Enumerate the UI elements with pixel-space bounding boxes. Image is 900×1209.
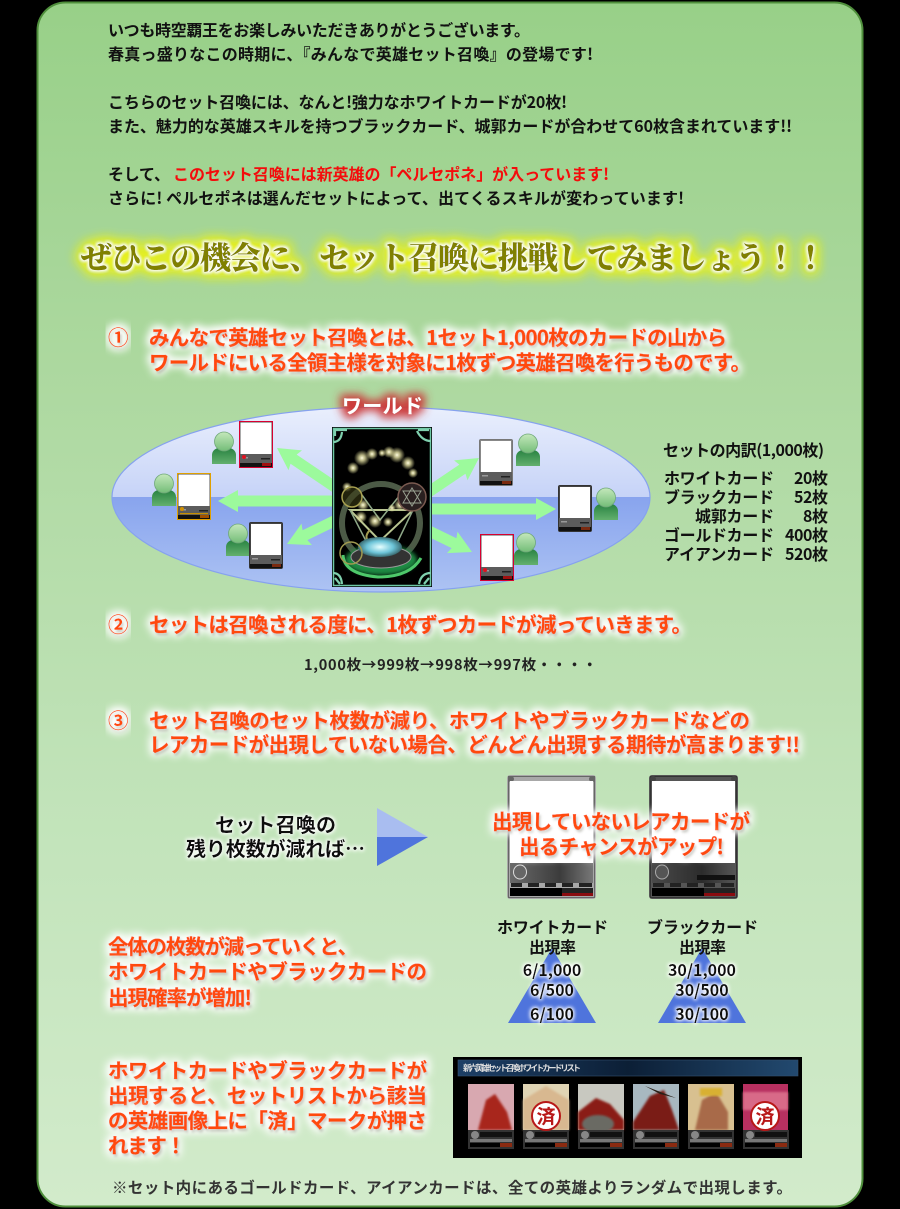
list card 6: 済	[755, 1102, 775, 1129]
screenshot: white card list: 新六英雄セット召喚 ホワイトカードリスト	[463, 1062, 581, 1074]
countdown text: 1,000枚→999枚→998枚→997枚・・・・	[304, 654, 597, 675]
text block: set contents: また、魅力的な英雄スキルを持つブラックカード、城郭カードが合わせて60枚含まれています!!	[108, 113, 792, 137]
pyramid: white card rate: 6/1,000	[523, 957, 581, 981]
text block: intro greeting: 春真っ盛りなこの時期に、『みんなで英雄セット召喚』の登場です!	[108, 41, 593, 65]
text block: stamp explanation	[108, 1054, 428, 1159]
arrow: blue triangle	[377, 808, 428, 866]
step 1 heading: みんなで英雄セット召喚とは、1セット1,000枚のカードの山から	[149, 321, 727, 351]
text block: stamp explanation: ホワイトカードやブラックカードが	[108, 1054, 428, 1084]
text block: new hero notice: このセット召喚には新英雄の「ペルセポネ」が入っています!	[173, 161, 609, 185]
players and cards: left side	[152, 422, 282, 568]
text block: intro greeting: いつも時空覇王をお楽しみいただきありがとうございます。	[108, 17, 530, 41]
step 2 heading: セットは召喚される度に、1枚ずつカードが減っていきます。	[149, 608, 692, 638]
pyramid: white card rate: 出現率	[529, 934, 576, 958]
pyramid: white card rate	[497, 914, 608, 1025]
text block: new hero notice: さらに! ペルセポネは選んだセットによって、出てくるスキルが変わっています!	[108, 185, 684, 209]
pyramid: black card rate: 出現率	[679, 934, 726, 958]
arrows from centre card	[218, 438, 556, 563]
card: black card frame	[649, 775, 738, 899]
card: white card frame	[507, 775, 596, 899]
step 3 heading: ③	[108, 704, 128, 734]
text block: new hero notice: そして、	[108, 161, 170, 185]
callout: rare card chance	[492, 805, 750, 860]
pyramid: black card rate: ブラックカード	[647, 914, 758, 938]
pyramid: white card rate: 6/100	[530, 1001, 574, 1025]
pyramid: black card rate: 30/1,000	[668, 957, 736, 981]
legend: set breakdown: 城郭カード	[695, 503, 774, 527]
text: remaining count: セット召喚の	[215, 809, 336, 838]
list card 1	[468, 1084, 514, 1149]
centre card: magic circle	[332, 427, 432, 587]
text block: probability increases: ホワイトカードやブラックカードの	[108, 955, 427, 985]
step 1 heading	[108, 321, 751, 376]
text: remaining count	[186, 809, 365, 862]
pyramid: white card rate: ホワイトカード	[497, 914, 608, 938]
players and cards: right side	[480, 434, 618, 580]
step 2 heading: ②	[108, 608, 128, 638]
text block: set contents	[108, 89, 792, 137]
list card 6	[743, 1084, 789, 1149]
pyramid: black card rate: 30/100	[675, 1001, 729, 1025]
list card 2: 済	[536, 1102, 556, 1129]
legend: set breakdown: 520枚	[785, 541, 828, 565]
text block: intro greeting	[108, 17, 593, 65]
legend: set breakdown: セットの内訳(1,000枚)	[663, 437, 824, 461]
text: remaining count: 残り枚数が減れば…	[186, 833, 365, 862]
pyramid: black card rate: 30/500	[675, 977, 729, 1001]
text block: probability increases: 全体の枚数が減っていくと、	[108, 930, 358, 960]
title: ぜひこの機会に、セット召喚に挑戦してみましょう！！	[81, 233, 826, 278]
step 3 heading: レアカードが出現していない場合、どんどん出現する期待が高まります!!	[149, 728, 800, 758]
pyramid: black card rate	[647, 914, 758, 1025]
legend: set breakdown: 400枚	[785, 522, 828, 546]
screenshot: white card list	[453, 1057, 802, 1158]
callout: rare card chance: 出るチャンスがアップ!	[519, 830, 724, 860]
text block: new hero notice	[108, 161, 684, 209]
text block: stamp explanation: の英雄画像上に「済」マークが押さ	[108, 1104, 427, 1134]
legend: set breakdown: アイアンカード	[664, 541, 774, 565]
text block: stamp explanation: れます！	[108, 1129, 186, 1159]
legend: set breakdown: 8枚	[803, 503, 828, 527]
list card 2	[523, 1084, 569, 1149]
legend: set breakdown: 20枚	[794, 465, 828, 489]
text block: probability increases	[108, 930, 427, 1011]
legend: set breakdown	[663, 437, 828, 565]
footnote: ※セット内にあるゴールドカード、アイアンカードは、全ての英雄よりランダムで出現します。	[112, 1176, 792, 1198]
callout: rare card chance: 出現していないレアカードが	[492, 805, 750, 835]
text block: probability increases: 出現確率が増加!	[108, 981, 252, 1011]
list card 3	[578, 1084, 624, 1149]
list card 4	[633, 1084, 679, 1149]
text block: set contents: こちらのセット召喚には、なんと!強力なホワイトカードが20枚!	[108, 89, 567, 113]
diagram: world ellipse	[112, 407, 650, 592]
step 3 heading: セット召喚のセット枚数が減り、ホワイトやブラックカードなどの	[149, 704, 750, 734]
step 1 heading: ワールドにいる全領主様を対象に1枚ずつ英雄召喚を行うものです。	[149, 346, 751, 376]
text block: stamp explanation: 出現すると、セットリストから該当	[108, 1079, 427, 1109]
legend: set breakdown: ゴールドカード	[664, 522, 774, 546]
step 3 heading	[108, 704, 800, 758]
legend: set breakdown: 52枚	[794, 484, 828, 508]
pyramid: white card rate: 6/500	[530, 977, 574, 1001]
legend: set breakdown: ホワイトカード	[664, 465, 774, 489]
list card 5	[688, 1084, 734, 1149]
step 1 heading: ①	[108, 321, 128, 351]
legend: set breakdown: ブラックカード	[664, 484, 774, 508]
label: world: ワールド	[342, 390, 423, 419]
